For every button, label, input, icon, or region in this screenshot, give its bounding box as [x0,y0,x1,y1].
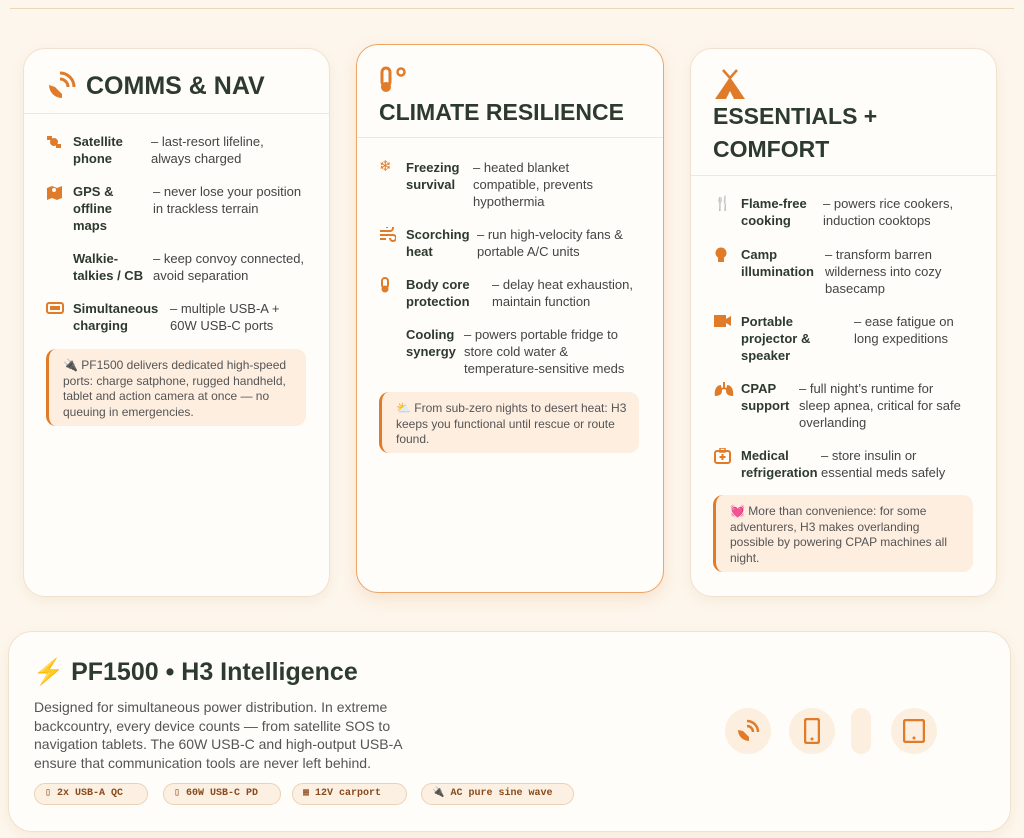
icon: thermometer [380,66,406,92]
item: freezing [379,158,593,209]
item: satellite phone: phone [73,151,112,166]
item: charging: 60W USB-C ports [170,318,273,333]
item: cooling: Cooling [406,327,454,342]
item: projector: – ease fatigue on [854,314,954,329]
item: illumination: illumination [741,264,814,279]
item: medical [714,448,946,480]
heading: ESSENTIALS + [713,103,877,129]
item: cpap: sleep apnea, critical for safe [799,398,961,413]
item: freezing: compatible, prevents [473,177,593,192]
pill: usb-a [34,783,148,805]
item: freezing: hypothermia [473,194,545,209]
item: illumination: Camp [741,247,777,262]
item: freezing: – heated blanket [473,160,569,175]
panel: essentials + comfort [690,48,997,597]
item: cooking [714,195,953,228]
icon: phone [789,708,835,754]
item: freezing: survival [406,177,455,192]
item: freezing: Freezing [406,160,459,175]
item: body core: Body core [406,277,470,292]
item: cooling: – powers portable fridge to [464,327,618,342]
item: scorching: heat [406,244,433,259]
pill: carport [292,783,407,805]
item: illumination: basecamp [825,281,885,296]
item: satellite phone [47,134,264,166]
item: scorching: – run high-velocity fans & [477,227,623,242]
item: projector [714,314,954,363]
item: gps: offline [73,201,112,216]
callout: 💓 More than convenience: for some adventurers, H3 makes overlanding possible by powering CPAP machines all night. [730,504,947,564]
item: cooking: cooking [741,213,791,228]
heading [713,103,877,162]
callout [46,349,306,426]
pill: usb-c [163,783,281,805]
item: cooling [406,327,624,376]
heading: COMFORT [713,136,829,162]
item: walkie talkies: – keep convoy connected, [153,251,304,266]
icon: dish [725,708,771,754]
item: body core: protection [406,294,470,309]
item: body core: maintain function [492,294,590,309]
item: cpap [714,381,961,430]
item: cpap: support [741,398,789,413]
panel: climate resilience: ❄ [379,158,392,175]
item: body core: – delay heat exhaustion, [492,277,633,292]
icon: satellite dish [49,72,76,98]
item: charging [46,301,279,333]
icon: blank [851,708,871,754]
item: medical: Medical [741,448,789,463]
item: walkie talkies [73,251,304,283]
icon: tablet [891,708,937,754]
item: illumination: wilderness into cozy [825,264,941,279]
item: scorching: portable A/C units [477,244,580,259]
item: scorching [380,227,623,259]
item: cooling: temperature-sensitive meds [464,361,624,376]
callout [379,392,639,453]
item: cpap: overlanding [799,415,866,430]
item: cooling: synergy [406,344,456,359]
item: projector: long expeditions [854,331,948,346]
item: illumination [716,247,942,296]
panel: comms & nav [23,48,330,597]
item: walkie talkies: talkies / CB [73,268,143,283]
item: cpap: CPAP [741,381,776,396]
item: projector: speaker [741,348,790,363]
heading: COMMS & NAV [86,72,265,100]
item: walkie talkies: Walkie- [73,251,118,266]
item: cooking: Flame-free [741,196,807,211]
item: charging: charging [73,318,128,333]
item: gps: maps [73,218,107,233]
item: satellite phone: – last-resort lifeline, [151,134,264,149]
body text: Designed for simultaneous power distribution. In extreme backcountry, every device counts — from satellite SOS to navigation tablets. The 60W USB-C and high-output USB-A ensure that communication tools are never left behind. [34,699,402,770]
item: cpap: – full night’s runtime for [799,381,933,396]
device icons [725,708,937,754]
item: charging: – multiple USB-A + [170,301,279,316]
pill: usb-c: ▯ 60W USB-C PD [174,788,258,799]
callout: 🔌 PF1500 delivers dedicated high-speed ports: charge satphone, rugged handheld, tablet and action camera at once — no queuing in emergencies. [63,358,286,418]
heading: CLIMATE RESILIENCE [379,99,624,125]
pill: ac [421,783,574,805]
item: cooking: induction cooktops [823,213,931,228]
item: charging: Simultaneous [73,301,158,316]
panel: essentials + comfort: 🍴 [714,195,731,211]
item: satellite phone: always charged [151,151,241,166]
item: gps [47,184,301,233]
item: scorching: Scorching [406,227,470,242]
pill: ac: 🔌 AC pure sine wave [432,788,552,799]
item: gps: – never lose your position [153,184,301,199]
item: body core [381,277,633,309]
panel: bottom summary [8,631,1011,832]
item: medical: refrigeration [741,465,818,480]
callout: ⛅ From sub-zero nights to desert heat: H3 keeps you functional until rescue or route found. [396,401,626,446]
item: projector: projector & [741,331,810,346]
item: walkie talkies: avoid separation [153,268,248,283]
callout [713,495,973,572]
item: cooking: – powers rice cookers, [823,196,953,211]
panel: climate resilience [356,44,664,593]
item: gps: GPS & [73,184,113,199]
item: projector: Portable [741,314,793,329]
item: medical: essential meds safely [821,465,945,480]
heading: ⚡ PF1500 • H3 Intelligence [33,658,358,686]
item: illumination: – transform barren [825,247,932,262]
item: medical: – store insulin or [821,448,916,463]
item: cooling: store cold water & [464,344,568,359]
icon: tent [715,69,745,99]
pill: carport: ▦ 12V carport [303,788,381,799]
item: gps: in trackless terrain [153,201,258,216]
item: satellite phone: Satellite [73,134,123,149]
pills [34,783,574,805]
pill: usb-a: ▯ 2x USB-A QC [45,788,123,799]
